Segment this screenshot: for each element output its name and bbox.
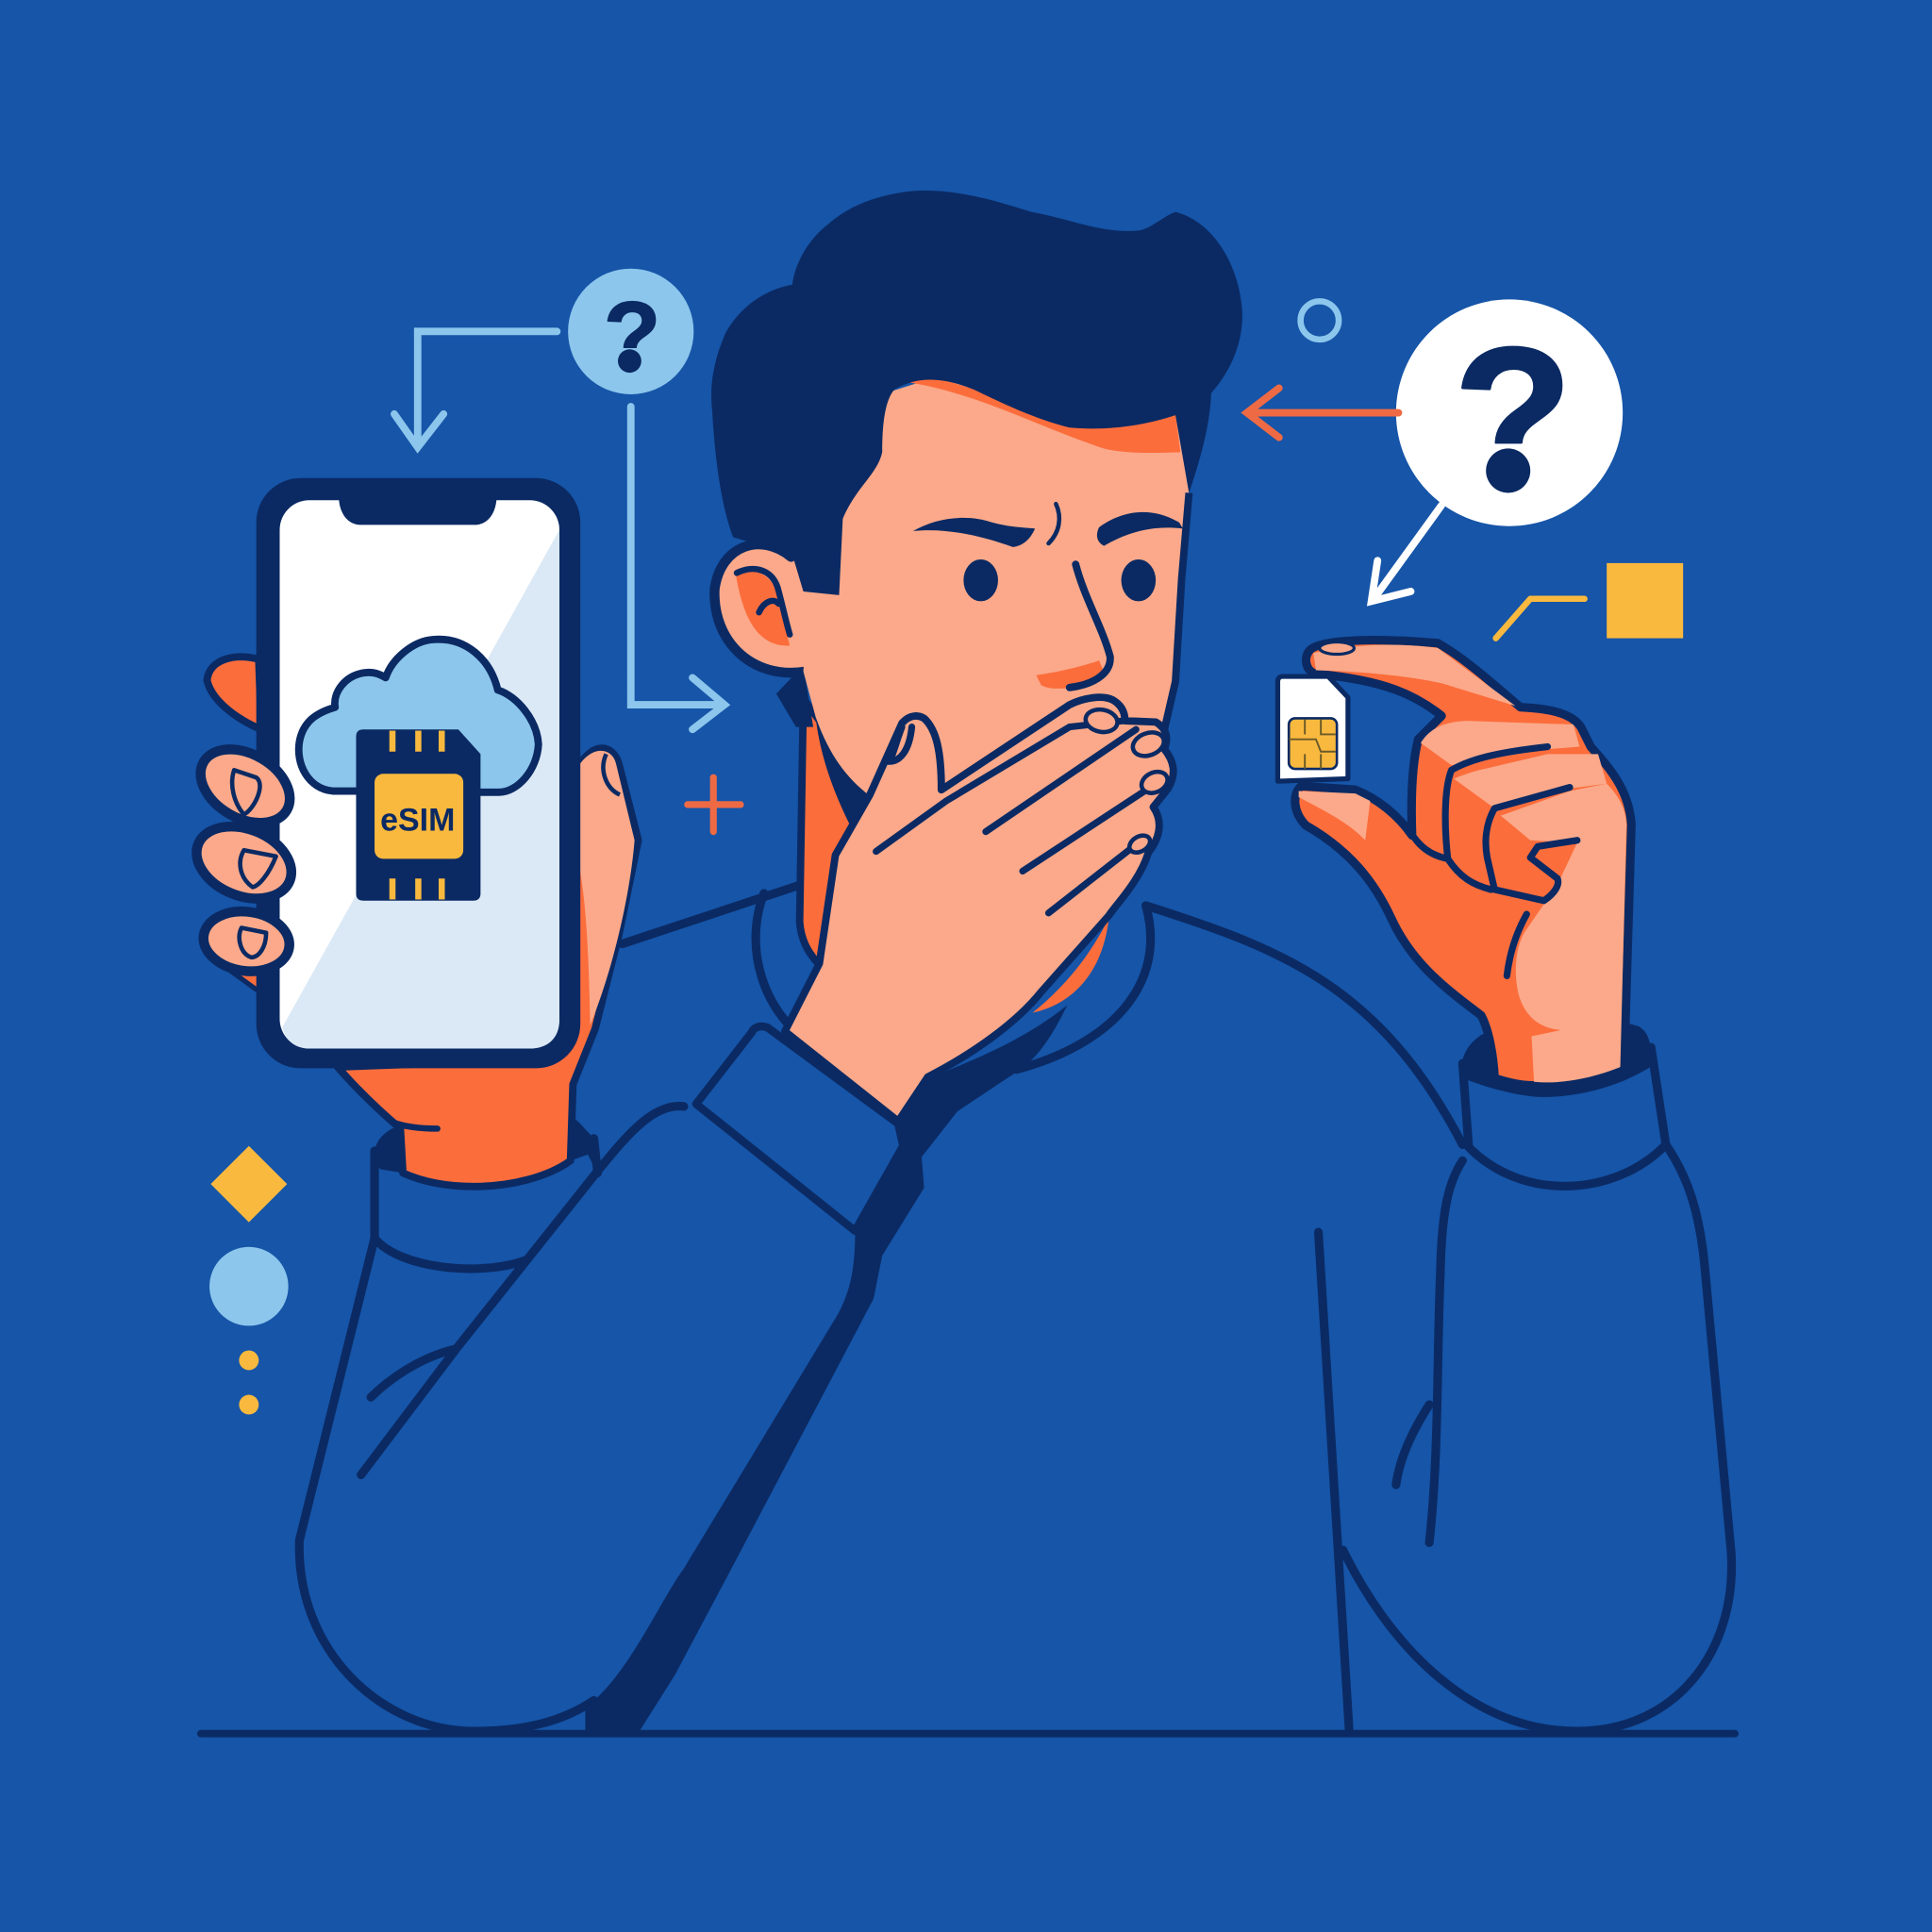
eyebrows [913, 512, 1183, 547]
arm shadow [585, 1006, 1067, 1731]
ear [714, 544, 832, 673]
small yellow dots [239, 1351, 258, 1414]
icon: eSIM chip: eSIM [380, 802, 455, 838]
left sleeve [299, 1107, 684, 1731]
phone [257, 478, 580, 1068]
icon: eSIM chip [356, 729, 480, 901]
phone fingers [186, 734, 303, 976]
yellow square [1607, 563, 1683, 639]
face right outline [1164, 492, 1189, 729]
forehead shadow [906, 378, 1180, 453]
arrow: bubble to man's head [1247, 388, 1398, 438]
neck shadow on right [1033, 918, 1109, 1013]
yellow connector line [1496, 599, 1585, 639]
right cuff dark band [1462, 1023, 1653, 1097]
neck [800, 699, 887, 963]
arrow: bubble to phone [394, 331, 557, 447]
forearm cuff [696, 1026, 903, 1231]
arrow: bubble to man [631, 407, 724, 729]
light blue dot [209, 1247, 289, 1325]
large question bubble: ? [1454, 307, 1573, 525]
icon: cloud [299, 640, 539, 792]
eyes [963, 559, 1156, 601]
ring [1301, 301, 1339, 340]
small question bubble: ? [604, 283, 660, 388]
jaw shadow [816, 717, 870, 825]
arrow: bubble to SIM [1372, 506, 1441, 601]
sweater body outline [623, 885, 1732, 1731]
plus sign [688, 777, 741, 832]
hand covering mouth [785, 697, 1174, 1122]
phone-holding hand behind phone [207, 657, 639, 1187]
SIM card [1277, 676, 1348, 781]
hand holding SIM [1295, 641, 1631, 1086]
small question bubble [568, 269, 693, 394]
hair back [776, 665, 813, 727]
large question bubble [1396, 299, 1623, 526]
table line [201, 1731, 1735, 1737]
frown crease [1049, 504, 1059, 543]
yellow diamond [210, 1146, 287, 1223]
face [804, 377, 1189, 813]
nose [1036, 564, 1110, 689]
hair [711, 191, 1242, 595]
